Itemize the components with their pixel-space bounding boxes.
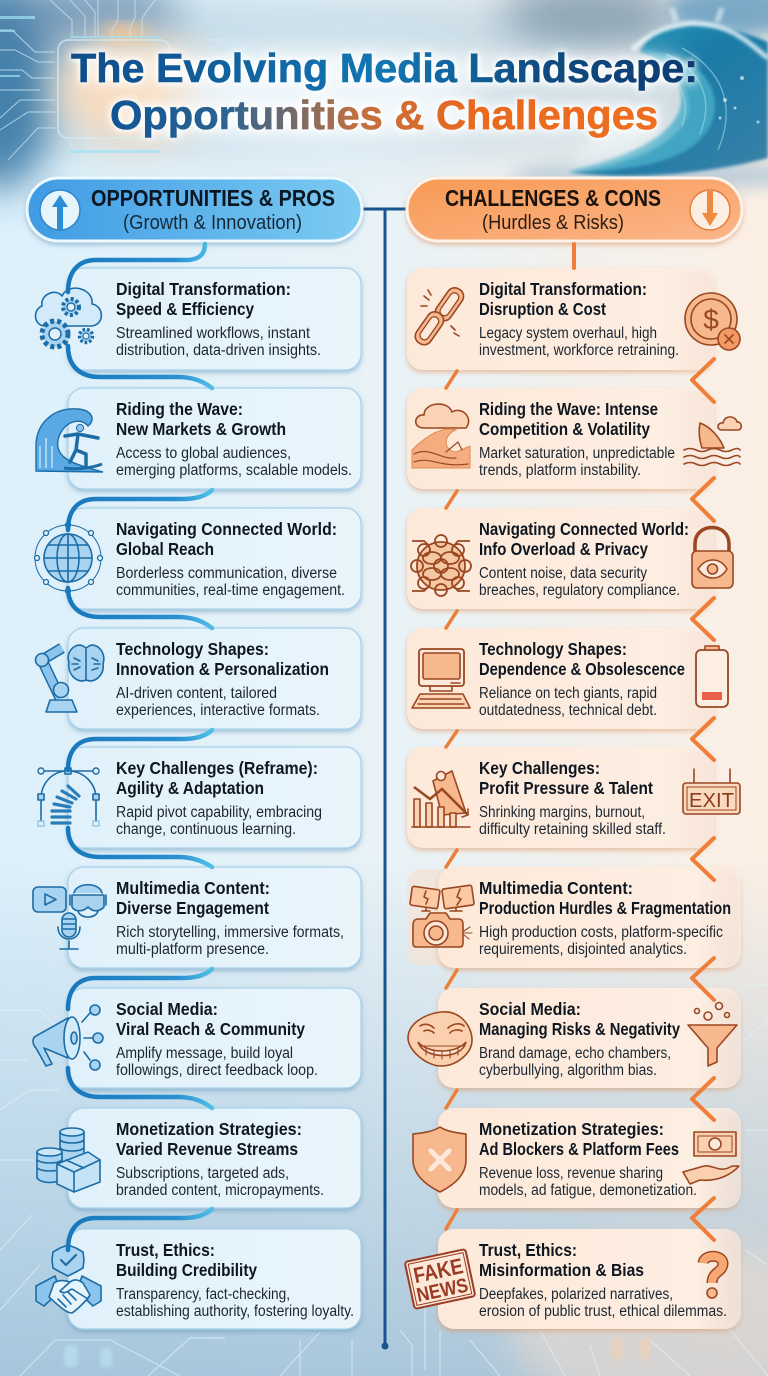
body text: Legacy system overhaul, high: [479, 325, 657, 342]
heading: [116, 878, 270, 918]
body text: difficulty retaining skilled staff.: [479, 821, 666, 838]
icon: tangled knot: [411, 535, 471, 596]
body text: Rapid pivot capability, embracing: [116, 804, 322, 821]
heading: Trust, Ethics:: [116, 1240, 215, 1260]
body text: distribution, data-driven insights.: [116, 342, 321, 359]
body text: Shrinking margins, burnout,: [479, 804, 645, 821]
icon: coin: $: [703, 304, 719, 335]
icon: funnel: [688, 1002, 737, 1066]
body text: [479, 804, 666, 838]
body text: Transparency, fact-checking,: [116, 1286, 290, 1303]
icon: cloud gears: [36, 288, 101, 347]
body text: [479, 685, 657, 719]
body text: Deepfakes, polarized narratives,: [479, 1286, 673, 1303]
panel: opportunity 4: [36, 628, 361, 729]
icon: robot arm and brain: [36, 645, 104, 712]
body text: [479, 1286, 727, 1320]
body text: Amplify message, build loyal: [116, 1045, 293, 1062]
icon: handshake badge: [36, 1245, 101, 1313]
icon: surfer wave: [36, 409, 103, 472]
body text: [116, 1045, 318, 1079]
circuit traces bottom: [0, 860, 768, 1376]
heading: [479, 999, 680, 1039]
icon: globe: [34, 522, 102, 594]
body text: trends, platform instability.: [479, 462, 641, 479]
body text: experiences, interactive formats.: [116, 702, 320, 719]
heading: Navigating Connected World:: [116, 519, 337, 539]
panel: challenge 7: [408, 988, 741, 1088]
heading: Technology Shapes:: [116, 639, 269, 659]
body text: [116, 1165, 324, 1199]
panel: challenge 1: [407, 268, 740, 370]
heading: Multimedia Content:: [116, 878, 270, 898]
icon: video VR microphone: [33, 885, 106, 949]
panel: opportunity 1: [36, 268, 361, 370]
heading: Social Media:: [479, 999, 581, 1019]
panel: opportunity 7: [33, 988, 361, 1088]
heading: Diverse Engagement: [116, 898, 269, 918]
body text: Reliance on tech giants, rapid: [479, 685, 657, 702]
heading: Info Overload & Privacy: [479, 539, 648, 559]
heading: Technology Shapes:: [479, 639, 627, 659]
body text: Brand damage, echo chambers,: [479, 1045, 671, 1062]
icon: low battery: [696, 646, 728, 707]
body text: followings, direct feedback loop.: [116, 1062, 318, 1079]
heading: [116, 399, 286, 439]
body text: [116, 445, 352, 479]
heading: Riding the Wave:: [116, 399, 243, 419]
heading: [479, 758, 653, 798]
body text: Revenue loss, revenue sharing: [479, 1165, 663, 1182]
circuit traces top left: [0, 0, 258, 175]
icon: money in hand: [683, 1132, 739, 1184]
heading: Viral Reach & Community: [116, 1019, 305, 1039]
icon: megaphone: [33, 1005, 103, 1070]
panel header: opportunities: (Growth & Innovation): [123, 212, 302, 234]
heading: [479, 279, 647, 319]
icon: question mark: [703, 1256, 723, 1298]
panel: challenge 5: [407, 747, 740, 848]
icon: padlock eye: [692, 528, 733, 588]
heading: Monetization Strategies:: [479, 1119, 664, 1139]
icon: bezier spring: [38, 768, 99, 826]
left connectors: [68, 244, 212, 1250]
heading: [479, 639, 685, 679]
panel: challenge 2: [407, 388, 741, 489]
heading: Managing Risks & Negativity: [479, 1019, 680, 1039]
central timeline: [362, 209, 406, 1350]
panel header: challenges: [407, 178, 742, 241]
body text: branded content, micropayments.: [116, 1182, 324, 1199]
heading: Multimedia Content:: [479, 878, 633, 898]
heading: Speed & Efficiency: [116, 299, 254, 319]
panel: challenge 4: [407, 628, 728, 729]
panel: challenge 3: [407, 508, 733, 609]
panel: opportunity 2: [36, 388, 361, 489]
body text: [116, 1286, 354, 1320]
title: Opportunities & Challenges: [110, 92, 658, 138]
icon: fake news stamp: NEWS: [415, 1275, 470, 1307]
body text: investment, workforce retraining.: [479, 342, 679, 359]
heading: [479, 878, 731, 918]
icon: broken chain: [412, 285, 467, 348]
icon: EXIT sign: [683, 769, 740, 814]
icon: coins and box: [37, 1128, 100, 1192]
heading: [116, 279, 291, 319]
heading: Monetization Strategies:: [116, 1119, 302, 1139]
heading: Misinformation & Bias: [479, 1260, 644, 1280]
heading: New Markets & Growth: [116, 419, 286, 439]
icon: cracked screens and camera: [410, 885, 474, 947]
panel: opportunity 9: [36, 1229, 361, 1329]
heading: Key Challenges:: [479, 758, 600, 778]
heading: Profit Pressure & Talent: [479, 778, 653, 798]
heading: Digital Transformation:: [116, 279, 291, 299]
heading: [116, 999, 305, 1039]
heading: [479, 399, 658, 439]
heading: Varied Revenue Streams: [116, 1139, 298, 1159]
heading: Digital Transformation:: [479, 279, 647, 299]
heading: [479, 519, 689, 559]
icon: old computer: [412, 649, 470, 708]
heading: Riding the Wave: Intense: [479, 399, 658, 419]
icon: coin: [685, 293, 740, 350]
icon: fake news stamp: FAKE: [411, 1253, 465, 1288]
heading: Competition & Volatility: [479, 419, 650, 439]
heading: [116, 758, 318, 798]
icon: shark fin: [684, 417, 741, 466]
heading: [479, 1119, 679, 1159]
body text: requirements, disjointed analytics.: [479, 941, 687, 958]
heading: Building Credibility: [116, 1260, 257, 1280]
icon: down arrow: [690, 190, 730, 230]
heading: Innovation & Personalization: [116, 659, 329, 679]
body text: [116, 924, 344, 958]
icon: weight and falling chart: [412, 771, 470, 827]
panel: opportunity 3: [34, 508, 361, 609]
body text: [479, 325, 679, 359]
title: [71, 45, 698, 138]
panel header: challenges: (Hurdles & Risks): [482, 212, 624, 234]
body text: [479, 1165, 697, 1199]
body text: cyberbullying, algorithm bias.: [479, 1062, 657, 1079]
body text: High production costs, platform-specific: [479, 924, 723, 941]
body text: [479, 1045, 671, 1079]
heading: Navigating Connected World:: [479, 519, 689, 539]
panel header: opportunities: OPPORTUNITIES & PROS: [91, 185, 335, 211]
body text: Access to global audiences,: [116, 445, 291, 462]
heading: [116, 1240, 257, 1280]
body text: Subscriptions, targeted ads,: [116, 1165, 289, 1182]
panel: opportunity 6: [33, 867, 361, 968]
icon: fake news stamp: [405, 1249, 475, 1309]
body text: [116, 804, 322, 838]
body text: [116, 685, 320, 719]
body text: outdatedness, technical debt.: [479, 702, 657, 719]
body text: change, continuous learning.: [116, 821, 296, 838]
body text: Borderless communication, diverse: [116, 565, 337, 582]
panel: challenge 8: [413, 1108, 741, 1208]
title glow: [90, 56, 680, 130]
icon: troll face: [408, 1012, 472, 1066]
body text: Content noise, data security: [479, 565, 647, 582]
icon: EXIT sign: EXIT: [689, 790, 734, 812]
body text: [479, 924, 723, 958]
body text: establishing authority, fostering loyalty.: [116, 1303, 354, 1320]
body text: [116, 325, 321, 359]
body text: multi-platform presence.: [116, 941, 269, 958]
heading: Global Reach: [116, 539, 214, 559]
icon: stormy wave: [412, 404, 470, 468]
panel header: opportunities: [27, 178, 362, 241]
panel: opportunity 5: [38, 747, 361, 848]
body text: [479, 565, 680, 599]
heading: [116, 519, 337, 559]
heading: [479, 1240, 644, 1280]
wave image: [510, 8, 768, 191]
right connectors: [446, 244, 714, 1240]
heading: [116, 1119, 302, 1159]
body text: erosion of public trust, ethical dilemmas.: [479, 1303, 727, 1320]
panel: challenge 9: [405, 1229, 741, 1329]
body text: Market saturation, unpredictable: [479, 445, 675, 462]
heading: Ad Blockers & Platform Fees: [479, 1139, 679, 1159]
heading: Dependence & Obsolescence: [479, 659, 685, 679]
icon: shield: [413, 1127, 466, 1192]
body text: breaches, regulatory compliance.: [479, 582, 680, 599]
icon: up arrow: [40, 190, 80, 230]
body text: emerging platforms, scalable models.: [116, 462, 352, 479]
heading: Trust, Ethics:: [479, 1240, 577, 1260]
body text: [479, 445, 675, 479]
panel: challenge 6: [407, 867, 741, 968]
body text: [116, 565, 345, 599]
heading: Social Media:: [116, 999, 218, 1019]
title: The Evolving Media Landscape:: [71, 45, 698, 91]
body text: Streamlined workflows, instant: [116, 325, 311, 342]
heading: [116, 639, 329, 679]
body text: AI-driven content, tailored: [116, 685, 277, 702]
heading: Key Challenges (Reframe):: [116, 758, 318, 778]
body text: models, ad fatigue, demonetization.: [479, 1182, 697, 1199]
body text: communities, real-time engagement.: [116, 582, 345, 599]
panel header: challenges: CHALLENGES & CONS: [445, 185, 661, 211]
panel: opportunity 8: [37, 1108, 361, 1208]
heading: Agility & Adaptation: [116, 778, 264, 798]
heading: Disruption & Cost: [479, 299, 606, 319]
body text: Rich storytelling, immersive formats,: [116, 924, 344, 941]
